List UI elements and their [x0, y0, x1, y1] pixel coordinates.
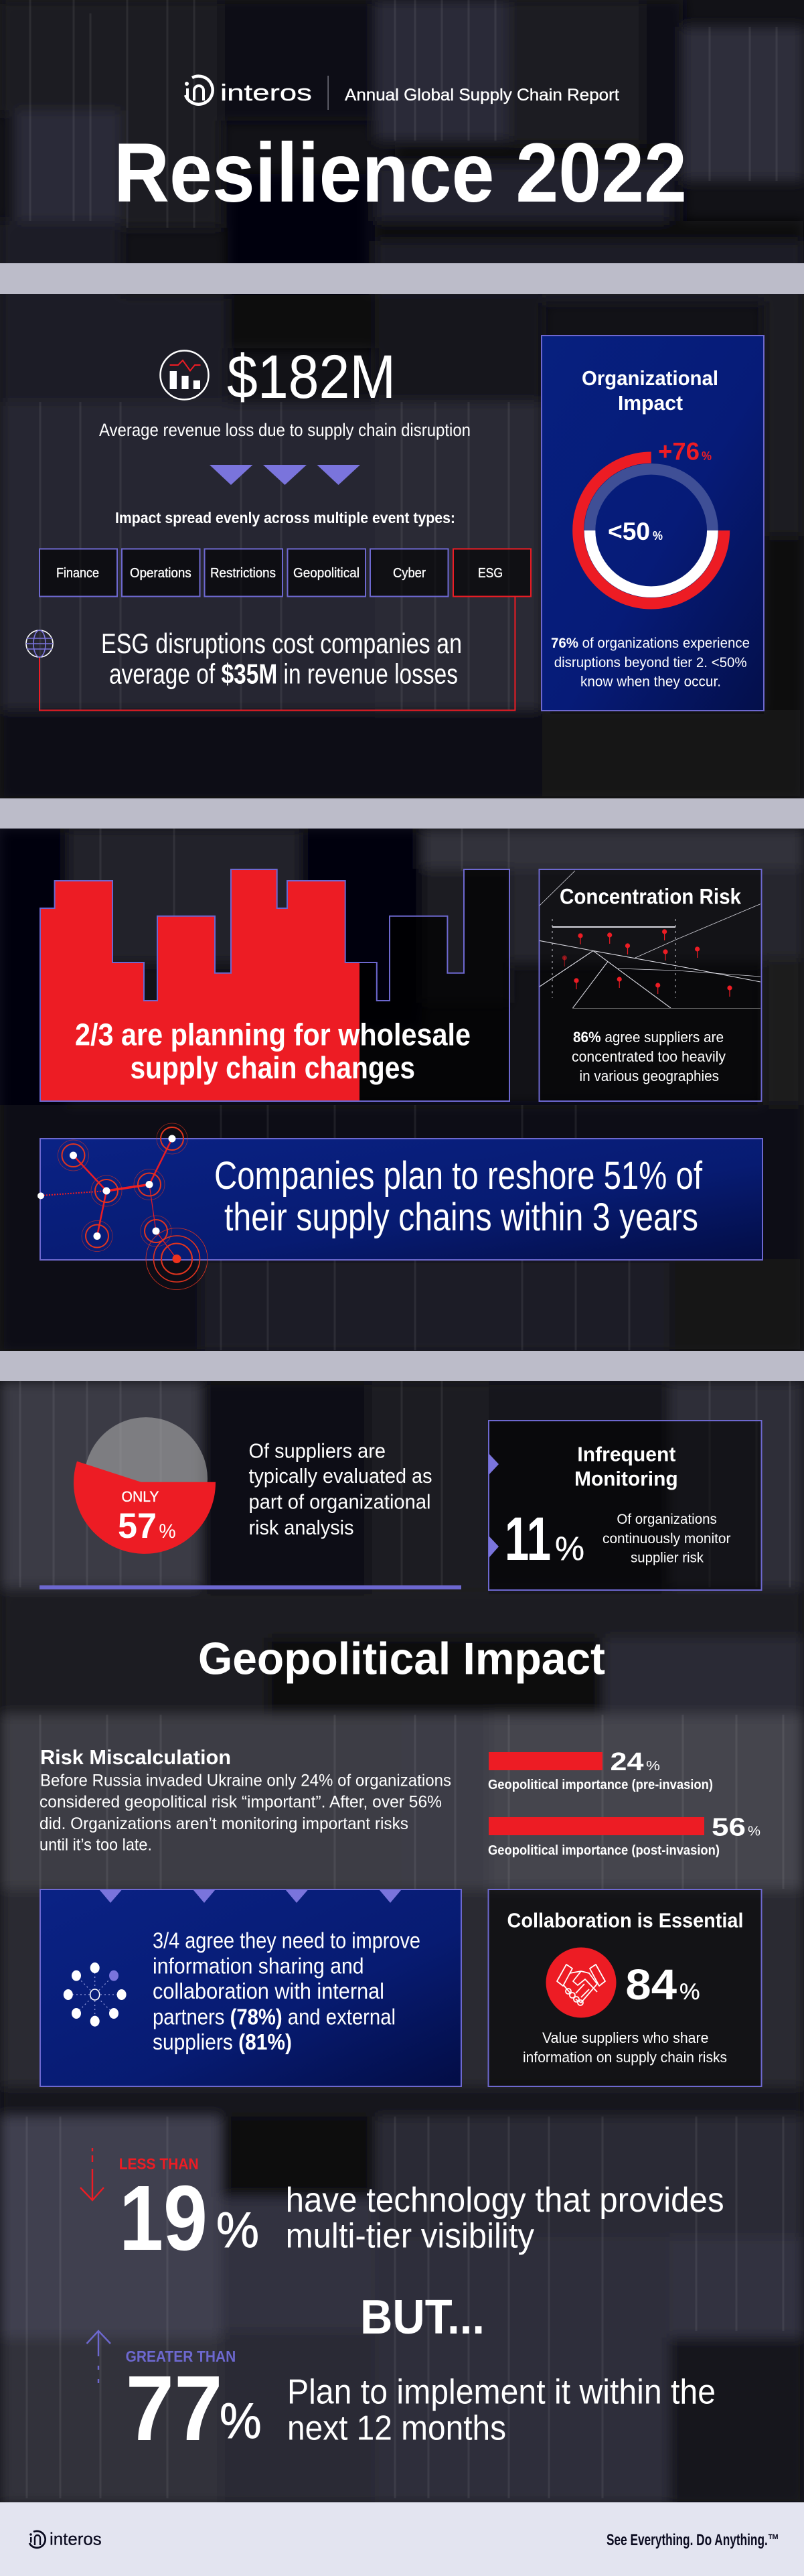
implementation text: Plan to implement it within the [287, 2373, 716, 2412]
ring labels: <50 [608, 518, 650, 545]
revenue loss caption: Average revenue loss due to supply chain disruption [99, 420, 471, 440]
stat: 77 percent: 77 [126, 2357, 223, 2460]
ESG callout text: ESG disruptions cost companies an [101, 628, 462, 659]
risk miscalculation text: Risk Miscalculation [40, 1745, 231, 1769]
arrow: down [80, 2148, 104, 2200]
caption: in various geographies [580, 1068, 719, 1084]
heading: Infrequent [577, 1443, 675, 1466]
panel: reshoring [37, 1123, 762, 1290]
caption: disruptions beyond tier 2. <50% [554, 655, 747, 670]
event type boxes: Cyber [393, 566, 426, 581]
stat: 77 percent [126, 2348, 262, 2460]
risk miscalculation text [39, 1745, 451, 1855]
icon: handshake [546, 1948, 616, 2017]
network graphic [37, 1123, 208, 1290]
caption: 76% of organizations experience [551, 636, 750, 651]
ring labels: % [702, 449, 712, 463]
divider bands [0, 263, 804, 1381]
collaboration text: information sharing and [153, 1954, 364, 1979]
caption [523, 2029, 727, 2066]
heading: geopolitical impact: Geopolitical Impact [198, 1633, 605, 1684]
arrow: up [87, 2331, 110, 2383]
visibility text: have technology that provides [286, 2181, 724, 2220]
panel: infrequent monitoring [489, 1421, 762, 1590]
revenue loss figure: $182M [227, 343, 396, 411]
footer logo: interos [50, 2529, 102, 2549]
caption: supplier risk [631, 1551, 704, 1566]
heading [582, 366, 718, 415]
panel: collaboration is essential [489, 1889, 762, 2086]
caption [572, 1029, 726, 1084]
risk miscalculation text: considered geopolitical risk “important”. After, over 56% [39, 1793, 442, 1812]
bar chart: geopolitical importance [488, 1748, 760, 1858]
caption: Value suppliers who share [542, 2029, 708, 2046]
collaboration text: partners (78%) and external [153, 2004, 396, 2029]
risk miscalculation text: did. Organizations aren’t monitoring important risks [39, 1814, 408, 1833]
pie chart: 57% of suppliers: 57 [118, 1506, 157, 1546]
supplier evaluation text: risk analysis [249, 1516, 353, 1539]
panel: collaboration need [40, 1889, 461, 2086]
header: logo and report name: interos [220, 80, 312, 106]
stat: 19 percent: 19 [119, 2167, 208, 2270]
84 percent: % [679, 1979, 700, 2005]
caption: concentrated too heavily [572, 1048, 726, 1065]
supplier evaluation text [249, 1439, 432, 1539]
stat: 77 percent: GREATER THAN [126, 2348, 236, 2365]
supplier evaluation text: typically evaluated as [249, 1464, 432, 1488]
event type boxes: ESG [478, 566, 503, 581]
bar chart: geopolitical importance: 56 [712, 1814, 746, 1842]
ESG callout text [101, 628, 462, 690]
event type boxes: Operations [130, 566, 191, 581]
heading: Monitoring [574, 1467, 678, 1490]
bar chart: geopolitical importance: % [646, 1759, 660, 1774]
caption: 86% agree suppliers are [573, 1029, 724, 1046]
risk miscalculation text: Before Russia invaded Ukraine only 24% of organizations [40, 1771, 451, 1790]
reshoring text [214, 1154, 703, 1239]
bar chart: geopolitical importance: % [748, 1824, 760, 1839]
caption: information on supply chain risks [523, 2049, 727, 2066]
supplier evaluation text: Of suppliers are [249, 1439, 386, 1463]
ring labels: +76 [658, 438, 700, 466]
heading: Concentration Risk [560, 885, 741, 909]
11 percent: 11 [505, 1505, 551, 1573]
event type boxes: Geopolitical [293, 566, 359, 581]
panel: factory skyline [40, 869, 509, 1101]
ring labels [608, 438, 712, 545]
collaboration text: collaboration with internal [153, 1979, 384, 2003]
footer [0, 2502, 804, 2576]
implementation text: next 12 months [287, 2409, 506, 2447]
reshoring text: Companies plan to reshore 51% of [214, 1154, 703, 1198]
ESG connector line [39, 597, 515, 710]
ring labels: % [653, 529, 663, 543]
pie chart: 57% of suppliers [74, 1417, 216, 1554]
caption [551, 636, 750, 690]
icon: circle of dots [64, 1962, 127, 2027]
event type boxes: Restrictions [210, 566, 276, 581]
bar chart: geopolitical importance: 24 [611, 1748, 644, 1776]
heading [574, 1443, 678, 1490]
panel: concentration risk [540, 869, 762, 1101]
icon: revenue chart [161, 351, 209, 399]
reshoring text: their supply chains within 3 years [224, 1196, 698, 1239]
heading: Collaboration is Essential [507, 1908, 743, 1932]
caption: know when they occur. [580, 674, 721, 690]
header: logo and report name: Annual Global Supply Chain Report [345, 86, 619, 104]
implementation text [287, 2373, 716, 2447]
collaboration text: 3/4 agree they need to improve [153, 1928, 420, 1953]
risk miscalculation text: until it’s too late. [39, 1836, 152, 1855]
title: Resilience 2022 [114, 127, 687, 220]
ring chart [578, 457, 724, 603]
11 percent: % [555, 1530, 584, 1567]
event type boxes [39, 549, 531, 596]
down triangles [210, 465, 360, 485]
panel: organizational impact [542, 336, 764, 711]
heading: Organizational [582, 366, 718, 390]
stat: 19 percent: % [216, 2202, 259, 2258]
pie chart: 57% of suppliers: % [159, 1520, 176, 1543]
caption: continuously monitor [602, 1531, 731, 1547]
factory headline: supply chain changes [130, 1050, 415, 1085]
84 percent [625, 1960, 700, 2009]
stat: 19 percent [119, 2155, 259, 2270]
event type boxes: Finance [56, 566, 99, 581]
factory headline [75, 1017, 471, 1085]
collaboration text [153, 1928, 420, 2054]
map lines [540, 871, 760, 1009]
header: logo and report name [185, 76, 619, 110]
factory headline: 2/3 are planning for wholesale [75, 1017, 471, 1052]
ESG callout text: average of $35M in revenue losses [109, 658, 458, 690]
event types heading: Impact spread evenly across multiple event types: [115, 509, 455, 526]
pie chart: 57% of suppliers: ONLY [122, 1488, 159, 1505]
supplier evaluation text: part of organizational [249, 1490, 431, 1514]
visibility text [286, 2181, 724, 2256]
collaboration text: suppliers (81%) [153, 2029, 292, 2054]
84 percent: 84 [625, 1960, 677, 2009]
stat: 19 percent: LESS THAN [119, 2155, 199, 2173]
map pins [562, 930, 732, 997]
icon: globe [26, 630, 53, 657]
heading: Impact [618, 391, 683, 415]
purple rule [39, 1585, 461, 1589]
icon: interos logo [185, 76, 213, 104]
bar chart: geopolitical importance: Geopolitical importance (post-invasion) [488, 1843, 720, 1858]
BUT: BUT... [360, 2291, 485, 2344]
stat: 77 percent: % [220, 2392, 262, 2449]
bar chart: geopolitical importance: Geopolitical importance (pre-invasion) [488, 1778, 713, 1792]
visibility text: multi-tier visibility [286, 2217, 534, 2256]
caption: Of organizations [617, 1512, 717, 1527]
caption [602, 1512, 731, 1566]
